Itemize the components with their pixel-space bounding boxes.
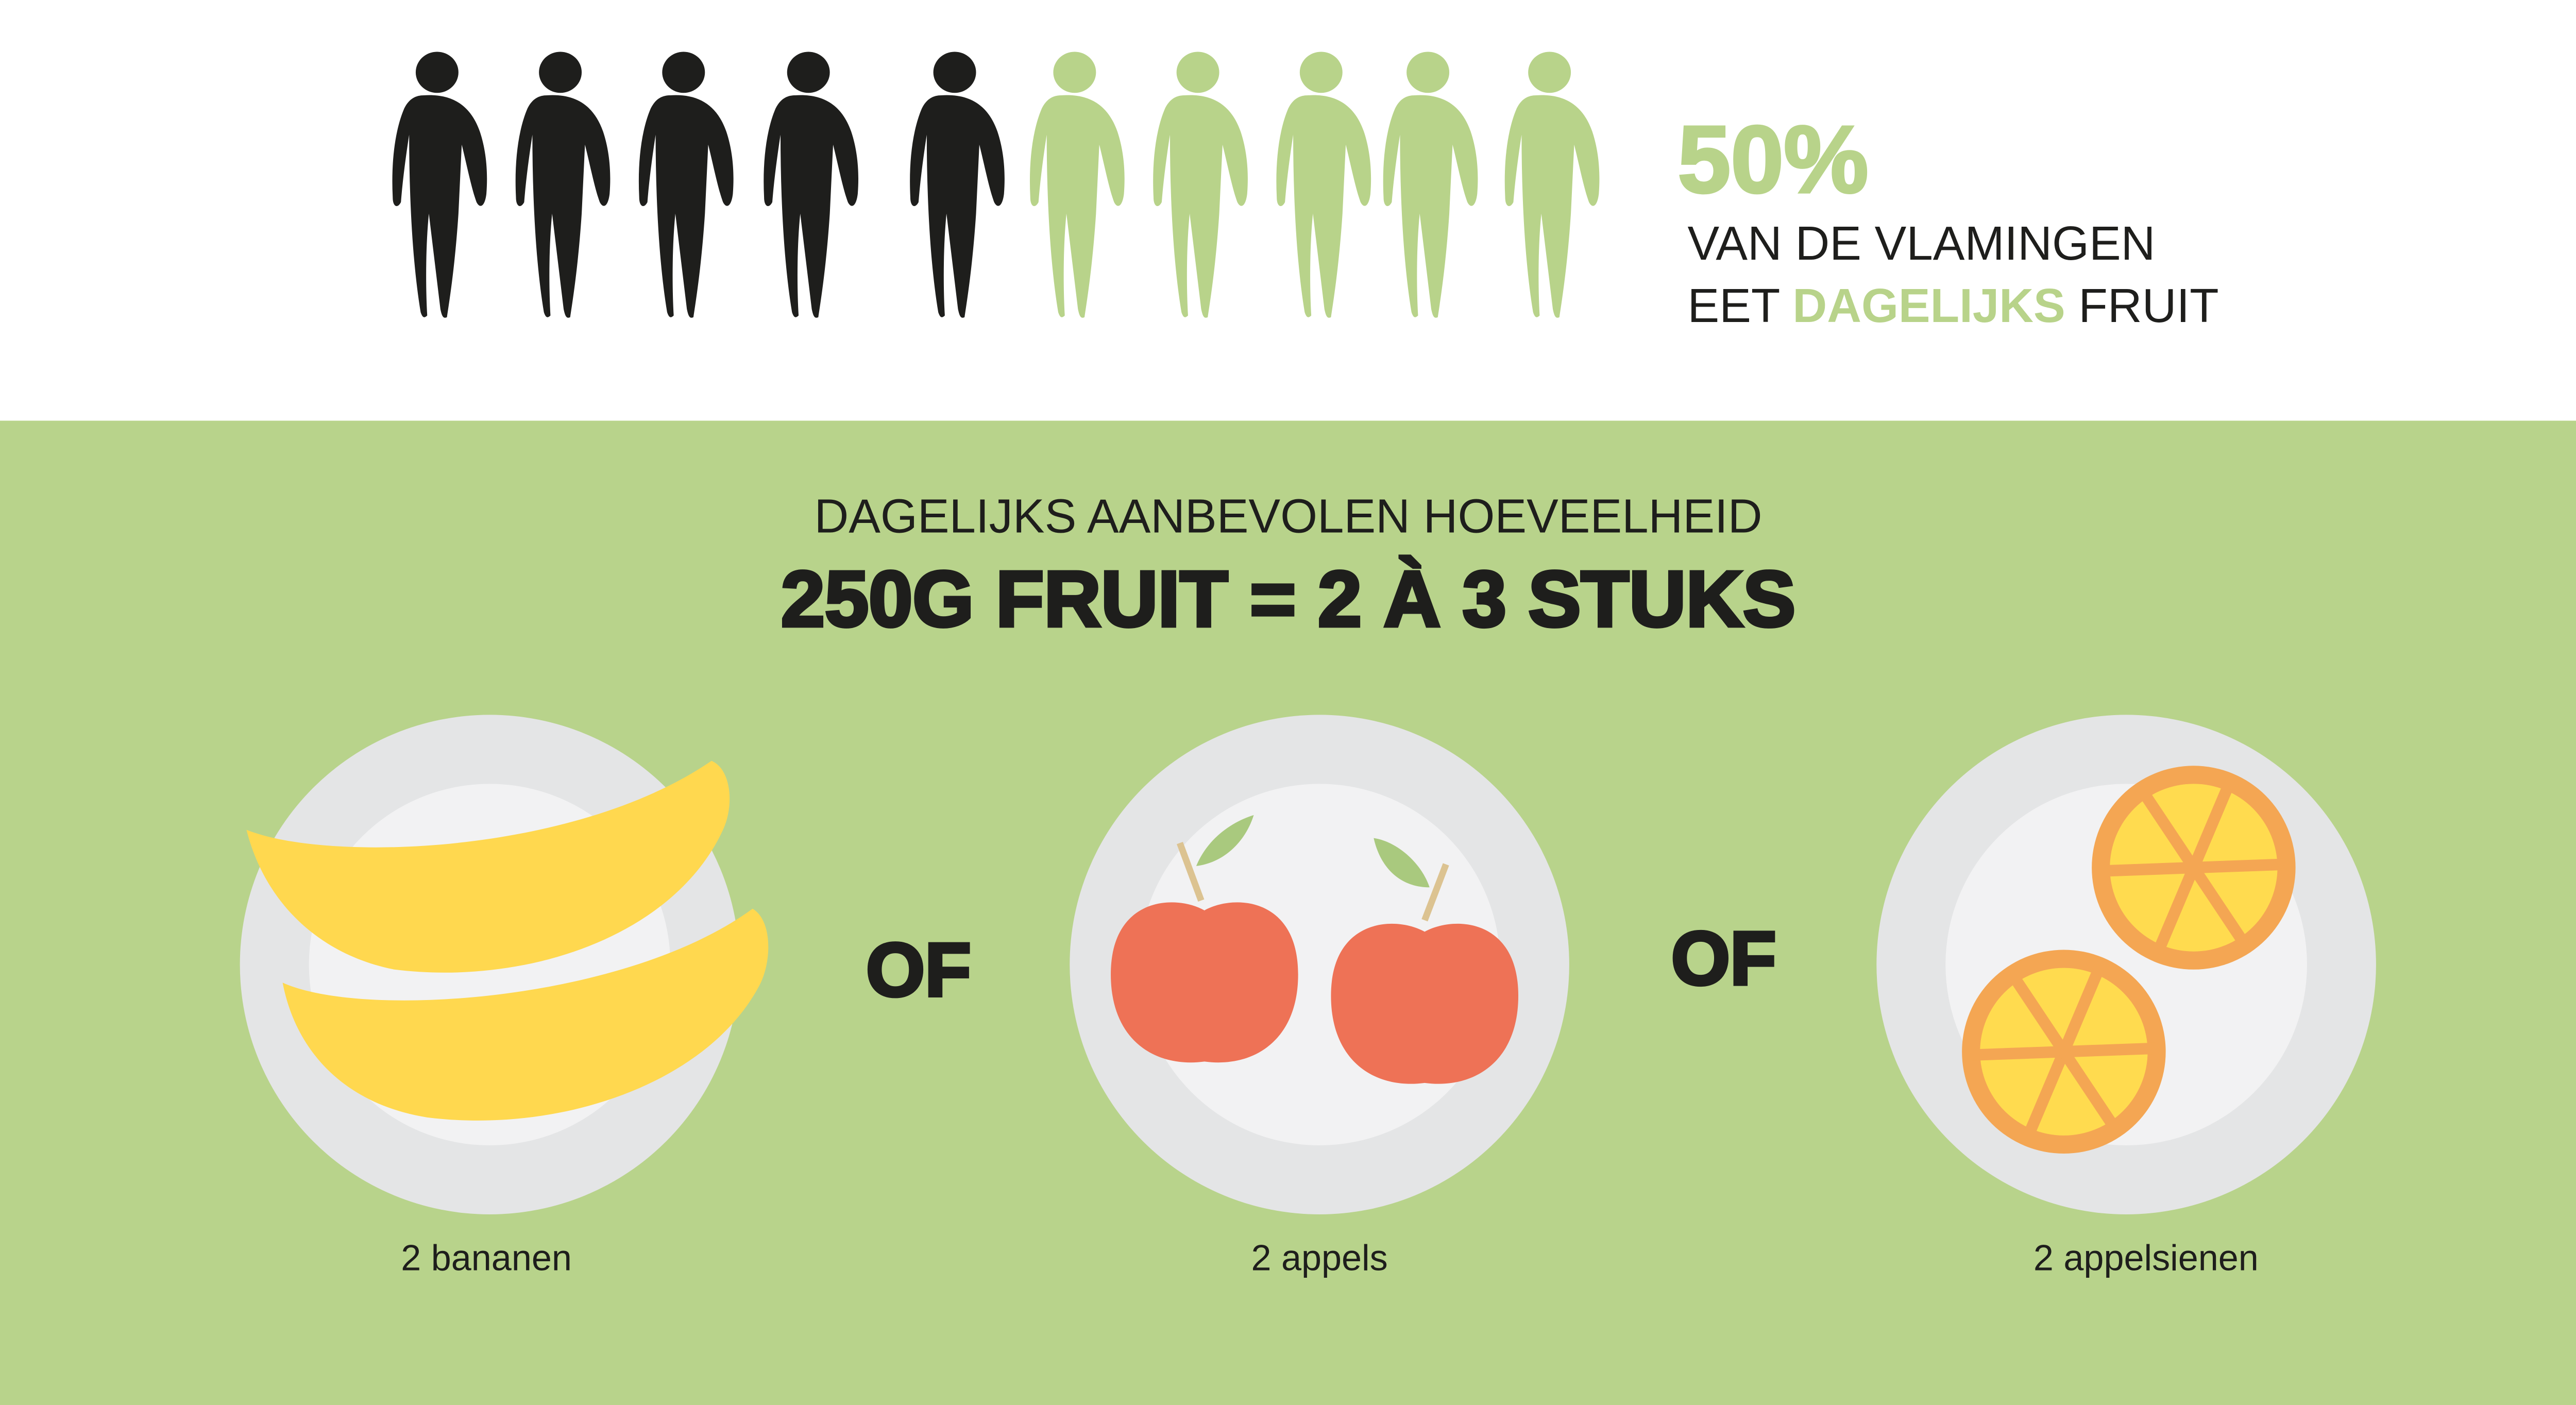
heading: DAGELIJKS AANBEVOLEN HOEVEELHEID xyxy=(814,489,1762,543)
OF 2: OF xyxy=(1671,916,1776,1001)
labels: 2 appels xyxy=(1251,1237,1388,1278)
labels: 2 bananen xyxy=(401,1237,572,1278)
plate: apples xyxy=(1070,715,1569,1214)
statistic text xyxy=(1677,107,2219,332)
plate: oranges xyxy=(1876,715,2376,1214)
statistic text: 50% xyxy=(1677,107,1869,213)
green panel xyxy=(0,421,2576,1405)
labels xyxy=(401,1237,2259,1278)
labels: 2 appelsienen xyxy=(2033,1237,2259,1278)
heading xyxy=(781,489,1795,643)
statistic text: EET DAGELIJKS FRUIT xyxy=(1688,279,2219,332)
plate: bananas xyxy=(240,715,768,1214)
people row xyxy=(392,52,1599,318)
heading: 250G FRUIT = 2 À 3 STUKS xyxy=(781,555,1795,643)
OF 1: OF xyxy=(866,928,971,1012)
statistic text: VAN DE VLAMINGEN xyxy=(1688,216,2155,270)
